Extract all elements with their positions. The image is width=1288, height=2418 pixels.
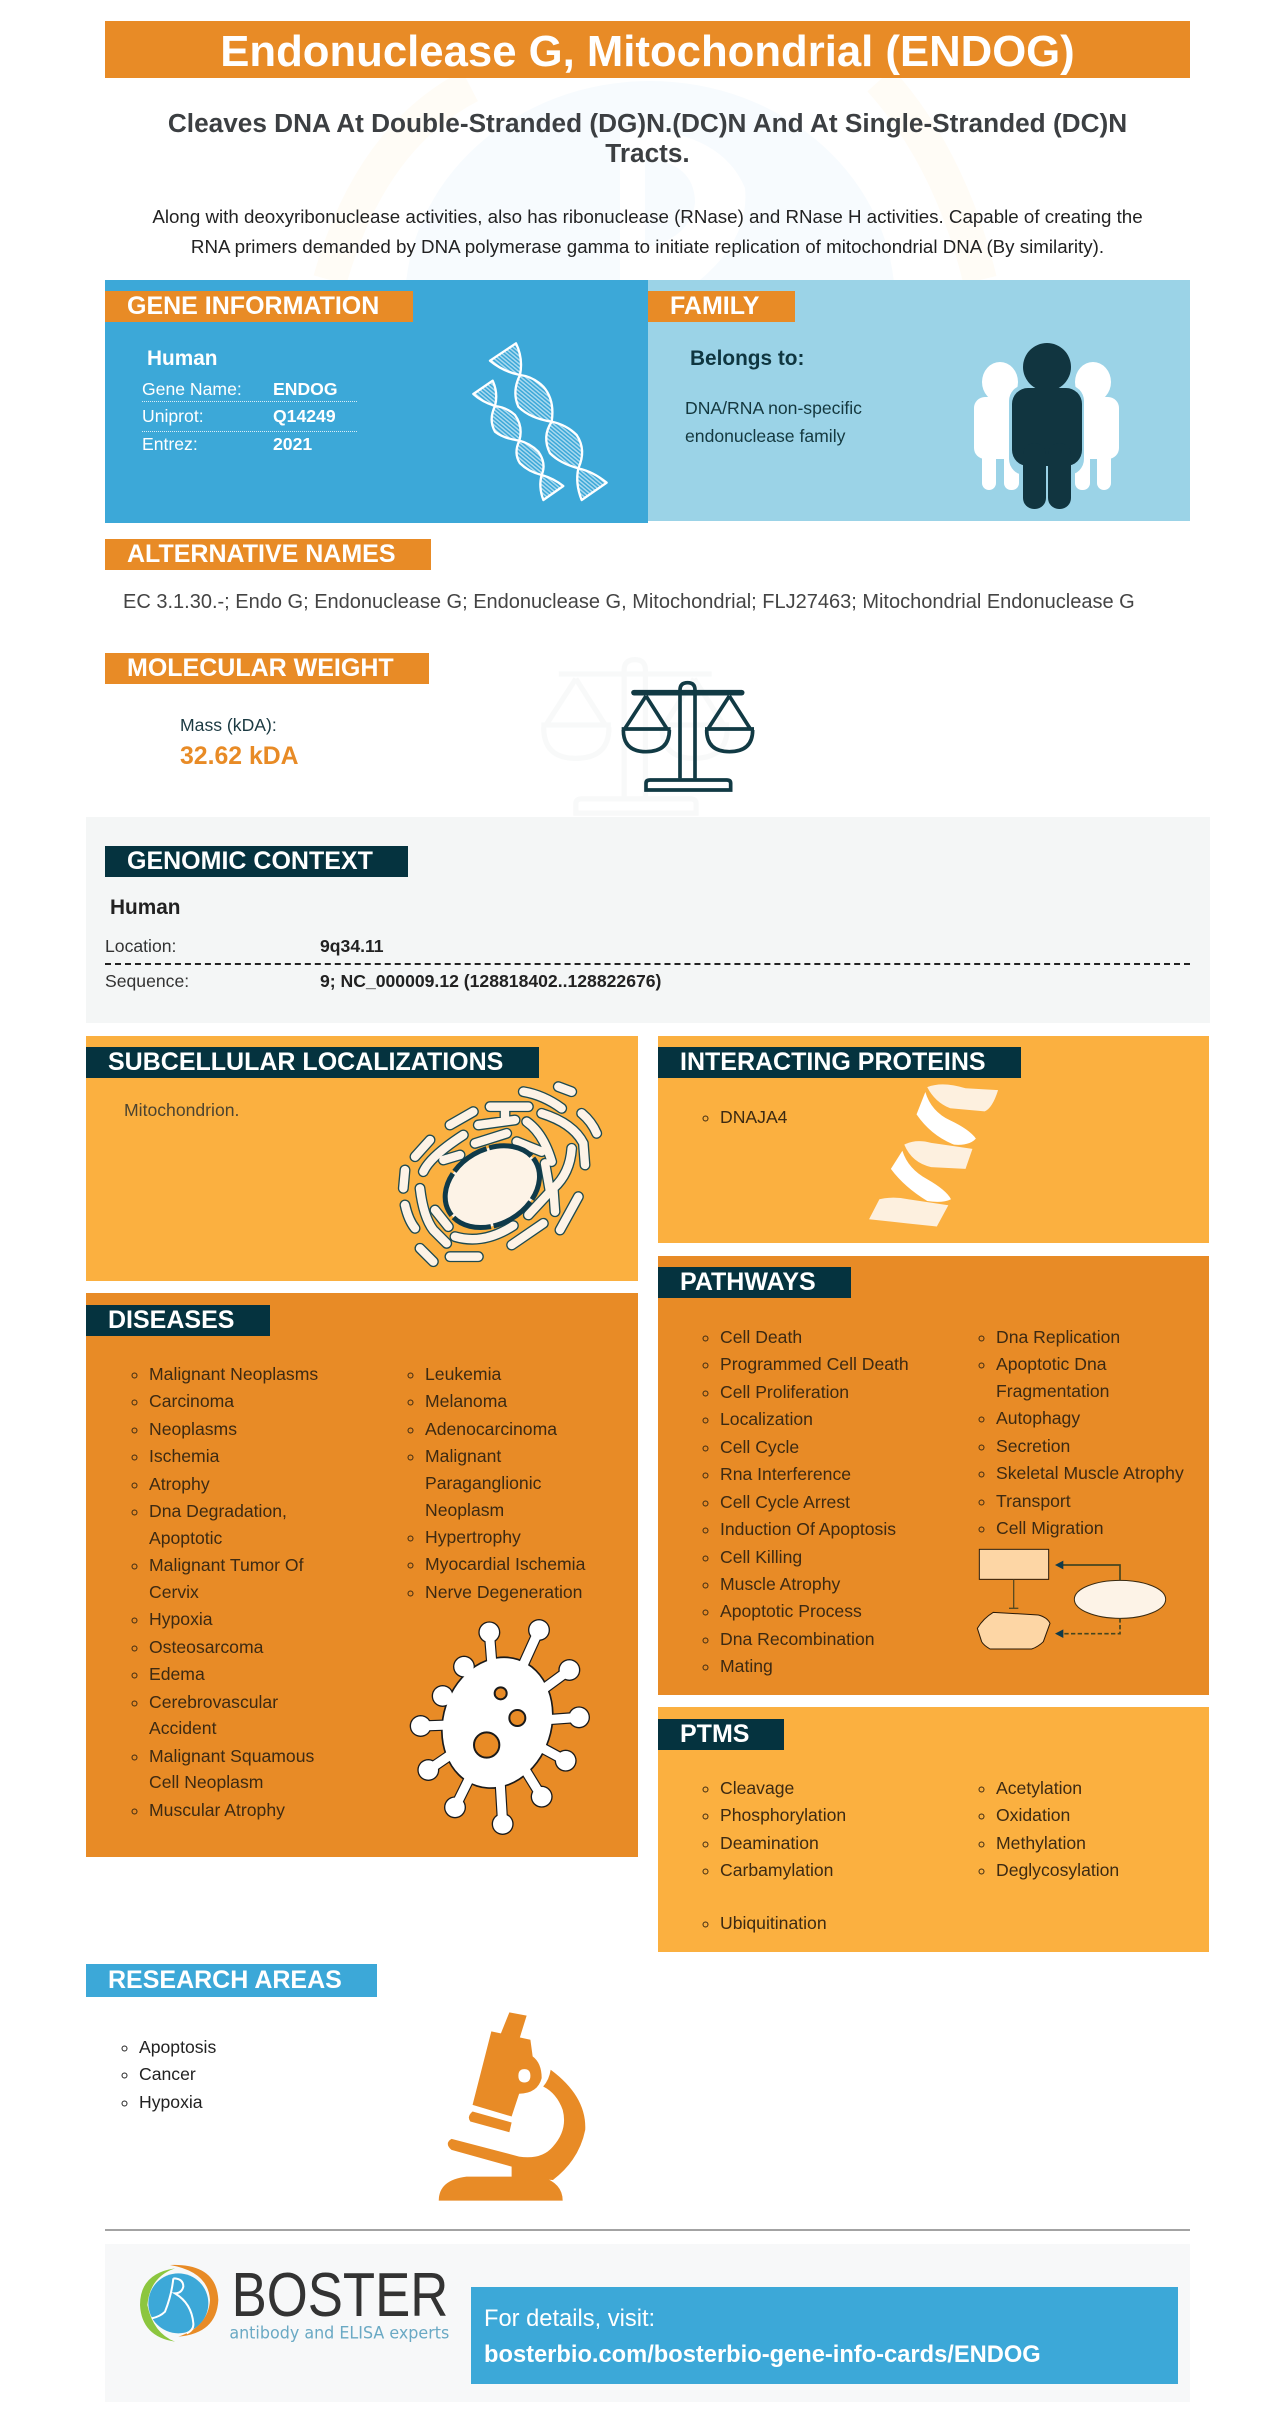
heading: interacting proteins: INTERACTING PROTEINS — [680, 1048, 986, 1076]
uniprot row — [142, 404, 357, 432]
heading: pathways — [658, 1267, 851, 1298]
alternative names text: EC 3.1.30.-; Endo G; Endonuclease G; Endonuclease G, Mitochondrial; FLJ27463; Mitochondrial Endonuclease G — [123, 591, 1135, 613]
uniprot row: Q14249 — [273, 406, 336, 426]
PTM list: column 2 — [978, 1778, 1119, 1880]
disease list: column 1: Edema — [149, 1664, 205, 1684]
disease list: column 1 — [132, 1364, 318, 1820]
disease list: column 2: Nerve Degeneration — [425, 1582, 582, 1602]
icon: balance scale with ghost — [622, 680, 754, 792]
description paragraph: RNA primers demanded by DNA polymerase gamma to initiate replication of mitochondrial DNA (By similarity). — [191, 236, 1104, 256]
disease list: column 1: Ischemia — [149, 1446, 219, 1466]
call to action label: For details, visit: — [484, 2306, 655, 2332]
PTM list: column 1 — [702, 1778, 846, 1933]
icon: DNA helices — [472, 342, 608, 502]
species label: Human — [147, 347, 217, 370]
PTM list: column 1: Carbamylation — [720, 1860, 833, 1880]
panel: subcellular localizations — [86, 1036, 638, 1281]
heading: PTMs: PTMS — [680, 1720, 749, 1748]
disease list: column 2: Melanoma — [425, 1391, 507, 1411]
disease list: column 2 — [408, 1364, 586, 1602]
heading: family: FAMILY — [670, 292, 759, 320]
title banner — [105, 21, 1190, 78]
pathway list: column 1: Programmed Cell Death — [720, 1354, 909, 1374]
panel: diseases — [86, 1293, 638, 1857]
pathway list: column 1: Induction Of Apoptosis — [720, 1519, 896, 1539]
subtitle — [168, 108, 1127, 168]
pathway list: column 1: Localization — [720, 1409, 813, 1429]
PTM list: column 2: Acetylation — [996, 1778, 1082, 1798]
heading: alternative names: ALTERNATIVE NAMES — [127, 540, 396, 568]
location row: Location: — [105, 936, 176, 956]
localization text: Mitochondrion. — [124, 1100, 239, 1120]
disease list: column 1: Neoplasms — [149, 1419, 237, 1439]
icon: pathway diagram — [976, 1548, 1166, 1650]
disease list: column 1: Osteosarcoma — [149, 1637, 263, 1657]
call to action url: bosterbio.com/bosterbio-gene-info-cards/ENDOG — [484, 2342, 1041, 2368]
heading: research areas — [86, 1964, 377, 1997]
disease list: column 1: Dna Degradation, Apoptotic — [149, 1501, 287, 1548]
PTM list: column 2: Methylation — [996, 1833, 1086, 1853]
pathway list: column 1: Cell Killing — [720, 1546, 802, 1566]
panel: pathways — [658, 1256, 1209, 1695]
disease list: column 1: Malignant Neoplasms — [149, 1364, 318, 1384]
pathway list: column 2: Apoptotic Dna Fragmentation — [996, 1354, 1109, 1401]
panel: footer — [105, 2244, 1190, 2402]
disease list: column 2: Hypertrophy — [425, 1527, 521, 1547]
PTM list: column 1: Deamination — [720, 1833, 819, 1853]
pathway list: column 1: Rna Interference — [720, 1464, 851, 1484]
sequence row: Sequence: — [105, 971, 189, 991]
research areas list: Hypoxia — [139, 2092, 203, 2112]
panel: family — [648, 280, 1190, 521]
pathway list: column 1: Mating — [720, 1656, 773, 1676]
description paragraph: Along with deoxyribonuclease activities, also has ribonuclease (RNase) and RNase H activities. Capable of creating the — [152, 206, 1143, 227]
interacting protein list: DNAJA4 — [720, 1107, 787, 1127]
heading: PTMs — [658, 1719, 784, 1750]
pathway list: column 2: Dna Replication — [996, 1327, 1120, 1347]
PTM list: column 1: Ubiquitination — [720, 1913, 827, 1933]
species label: Human — [110, 896, 180, 919]
pathway list: column 1: Cell Death — [720, 1327, 802, 1347]
entrez row — [142, 434, 312, 454]
icon: people — [974, 343, 1119, 509]
description paragraph — [152, 206, 1143, 257]
icon: microscope — [438, 2012, 586, 2201]
uniprot row: Uniprot: — [142, 406, 204, 426]
family description: endonuclease family — [685, 426, 845, 446]
gene name row — [142, 377, 357, 402]
panel: gene information — [105, 280, 648, 523]
icon: virus — [410, 1619, 590, 1835]
sequence row — [105, 971, 661, 991]
panel: PTMs — [658, 1707, 1209, 1952]
research areas list: Cancer — [139, 2064, 196, 2084]
heading: diseases — [86, 1305, 270, 1336]
heading: pathways: PATHWAYS — [680, 1268, 816, 1296]
heading: diseases: DISEASES — [108, 1306, 234, 1334]
disease list: column 1: Cerebrovascular Accident — [149, 1692, 278, 1738]
entrez row: Entrez: — [142, 434, 198, 454]
heading: family — [648, 291, 795, 322]
disease list: column 2: Myocardial Ischemia — [425, 1554, 585, 1574]
disease list: column 2: Malignant Paraganglionic Neoplasm — [425, 1446, 541, 1520]
gene name row: Gene Name: — [142, 379, 242, 399]
background watermark logo — [314, 78, 996, 280]
pathway list: column 2: Secretion — [996, 1436, 1070, 1456]
logo: Boster: BOSTER — [232, 2261, 448, 2330]
research areas list — [122, 2037, 216, 2112]
PTM list: column 2: Oxidation — [996, 1805, 1070, 1825]
pathway list: column 1: Muscle Atrophy — [720, 1574, 840, 1594]
pathway list: column 2 — [978, 1327, 1184, 1538]
location row — [105, 936, 384, 956]
pathway list: column 1: Cell Cycle — [720, 1437, 799, 1457]
belongs to label: Belongs to: — [690, 347, 804, 370]
panel: interacting proteins — [658, 1036, 1209, 1243]
disease list: column 2: Adenocarcinoma — [425, 1419, 557, 1439]
heading: subcellular localizations: SUBCELLULAR LOCALIZATIONS — [108, 1048, 503, 1076]
heading: molecular weight: MOLECULAR WEIGHT — [127, 654, 394, 682]
PTM list: column 1: Cleavage — [720, 1778, 794, 1798]
PTM list: column 1: Phosphorylation — [720, 1805, 846, 1825]
disease list: column 1: Atrophy — [149, 1474, 210, 1494]
gene name row: ENDOG — [273, 379, 338, 399]
pathway list: column 1: Apoptotic Process — [720, 1601, 862, 1621]
family description: DNA/RNA non-specific — [685, 398, 862, 418]
sequence row: 9; NC_000009.12 (128818402..128822676) — [320, 971, 661, 991]
dashed divider — [105, 963, 1190, 965]
PTM list: column 2: Deglycosylation — [996, 1860, 1119, 1880]
entrez row: 2021 — [273, 434, 312, 454]
disease list: column 1: Muscular Atrophy — [149, 1800, 285, 1820]
pathway list: column 1: Cell Proliferation — [720, 1382, 849, 1402]
heading: gene information: GENE INFORMATION — [127, 292, 379, 320]
disease list: column 1: Malignant Squamous Cell Neoplasm — [149, 1746, 314, 1792]
family description — [685, 398, 862, 446]
logo: Boster — [140, 2261, 449, 2342]
pathway list: column 2: Autophagy — [996, 1408, 1080, 1428]
icon: mitochondrion cell — [398, 1081, 602, 1268]
subtitle: Tracts. — [605, 138, 690, 168]
title banner: Endonuclease G, Mitochondrial (ENDOG) — [220, 27, 1075, 76]
pathway list: column 1: Dna Recombination — [720, 1629, 875, 1649]
mass label: Mass (kDA): — [180, 715, 277, 735]
logo: Boster: antibody and ELISA experts — [229, 2323, 449, 2342]
pathway list: column 2: Transport — [996, 1491, 1071, 1511]
disease list: column 1: Carcinoma — [149, 1391, 234, 1411]
pathway list: column 1 — [702, 1327, 909, 1676]
heading: research areas: RESEARCH AREAS — [108, 1966, 342, 1994]
footer divider — [105, 2229, 1190, 2231]
panel: genomic context — [86, 817, 1210, 1023]
disease list: column 1: Malignant Tumor Of Cervix — [149, 1555, 304, 1602]
icon: protein ribbon — [869, 1084, 998, 1226]
disease list: column 1: Hypoxia — [149, 1609, 213, 1629]
research areas list: Apoptosis — [139, 2037, 216, 2057]
subtitle: Cleaves DNA At Double-Stranded (DG)N.(DC)N And At Single-Stranded (DC)N — [168, 108, 1127, 138]
mass value: 32.62 kDA — [180, 743, 299, 770]
disease list: column 2: Leukemia — [425, 1364, 501, 1384]
pathway list: column 2: Skeletal Muscle Atrophy — [996, 1463, 1184, 1483]
heading: genomic context: GENOMIC CONTEXT — [127, 847, 373, 875]
pathway list: column 2: Cell Migration — [996, 1518, 1104, 1538]
location row: 9q34.11 — [320, 936, 384, 956]
call to action box — [471, 2287, 1178, 2384]
pathway list: column 1: Cell Cycle Arrest — [720, 1492, 850, 1512]
